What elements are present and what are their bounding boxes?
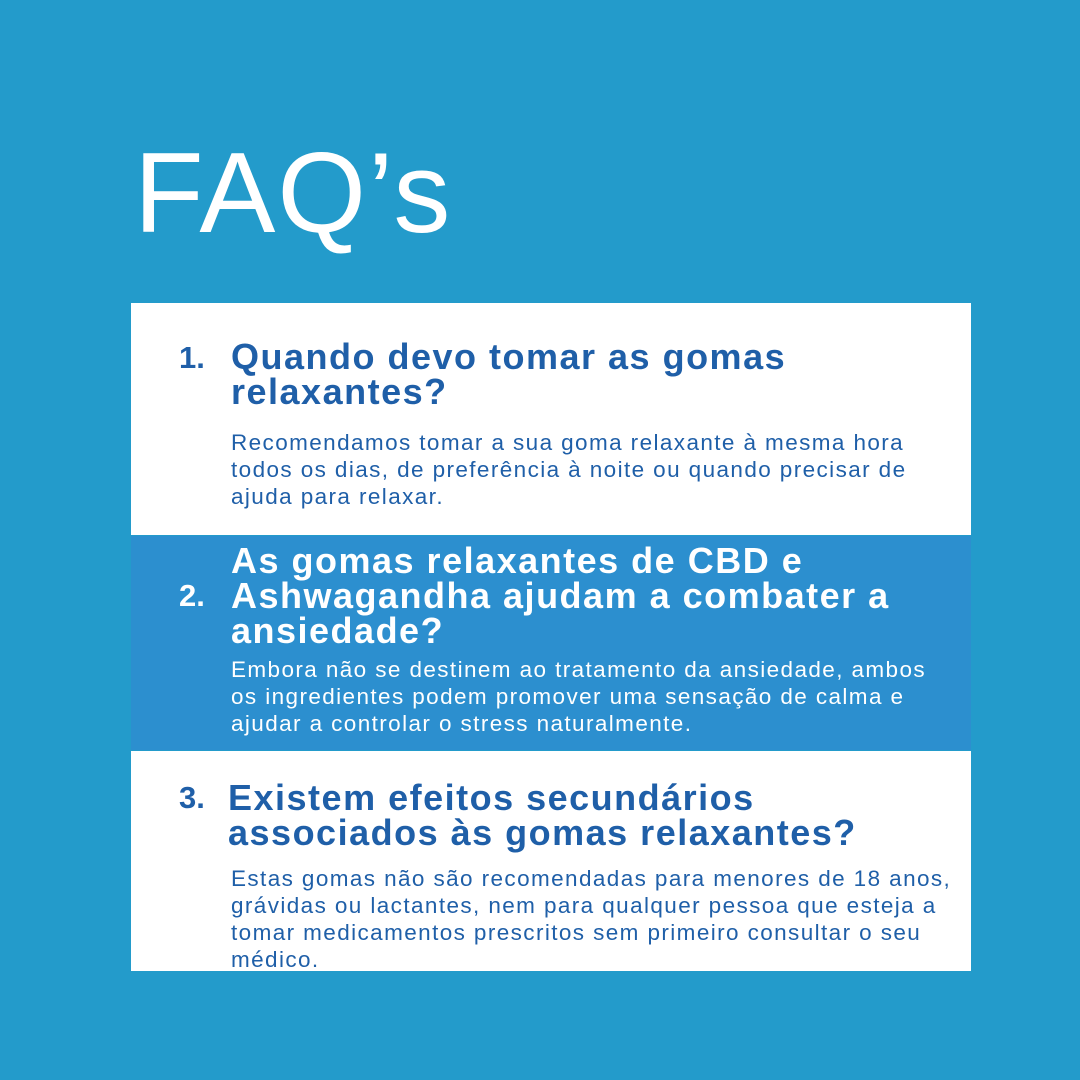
number 2: 2. bbox=[179, 578, 205, 613]
answer 2: Embora não se destinem ao tratamento da ansiedade, ambos bbox=[231, 657, 926, 682]
answer 1: Recomendamos tomar a sua goma relaxante à mesma hora bbox=[231, 430, 904, 455]
answer 1: todos os dias, de preferência à noite ou quando precisar de bbox=[231, 457, 906, 482]
heading 2: ansiedade? bbox=[231, 610, 444, 651]
answer 3: tomar medicamentos prescritos sem primeiro consultar o seu bbox=[231, 920, 921, 945]
answer 2: ajudar a controlar o stress naturalmente. bbox=[231, 711, 692, 736]
answer 3: Estas gomas não são recomendadas para menores de 18 anos, bbox=[231, 866, 951, 891]
answer 2: os ingredientes podem promover uma sensação de calma e bbox=[231, 684, 904, 709]
answer 3: médico. bbox=[231, 947, 320, 972]
panel: question 3 bbox=[131, 751, 971, 971]
answer 1 bbox=[231, 430, 906, 509]
answer 3 bbox=[231, 866, 951, 972]
heading 3: associados às gomas relaxantes? bbox=[228, 812, 857, 853]
heading 2: As gomas relaxantes de CBD e bbox=[231, 540, 803, 581]
answer 2 bbox=[231, 657, 926, 736]
answer 3: grávidas ou lactantes, nem para qualquer pessoa que esteja a bbox=[231, 893, 937, 918]
number 1: 1. bbox=[179, 340, 205, 375]
heading 1: Quando devo tomar as gomas bbox=[231, 336, 786, 377]
heading 3 bbox=[228, 777, 857, 853]
panel: question 1 bbox=[131, 303, 971, 535]
answer 1: ajuda para relaxar. bbox=[231, 484, 444, 509]
heading 1 bbox=[231, 336, 786, 412]
heading 2: Ashwagandha ajudam a combater a bbox=[231, 575, 890, 616]
heading 3: Existem efeitos secundários bbox=[228, 777, 755, 818]
heading 2 bbox=[231, 540, 890, 651]
panel: question 2 bbox=[131, 536, 971, 750]
number 3: 3. bbox=[179, 780, 205, 815]
heading 1: relaxantes? bbox=[231, 371, 448, 412]
title: FAQ’s bbox=[134, 130, 452, 257]
